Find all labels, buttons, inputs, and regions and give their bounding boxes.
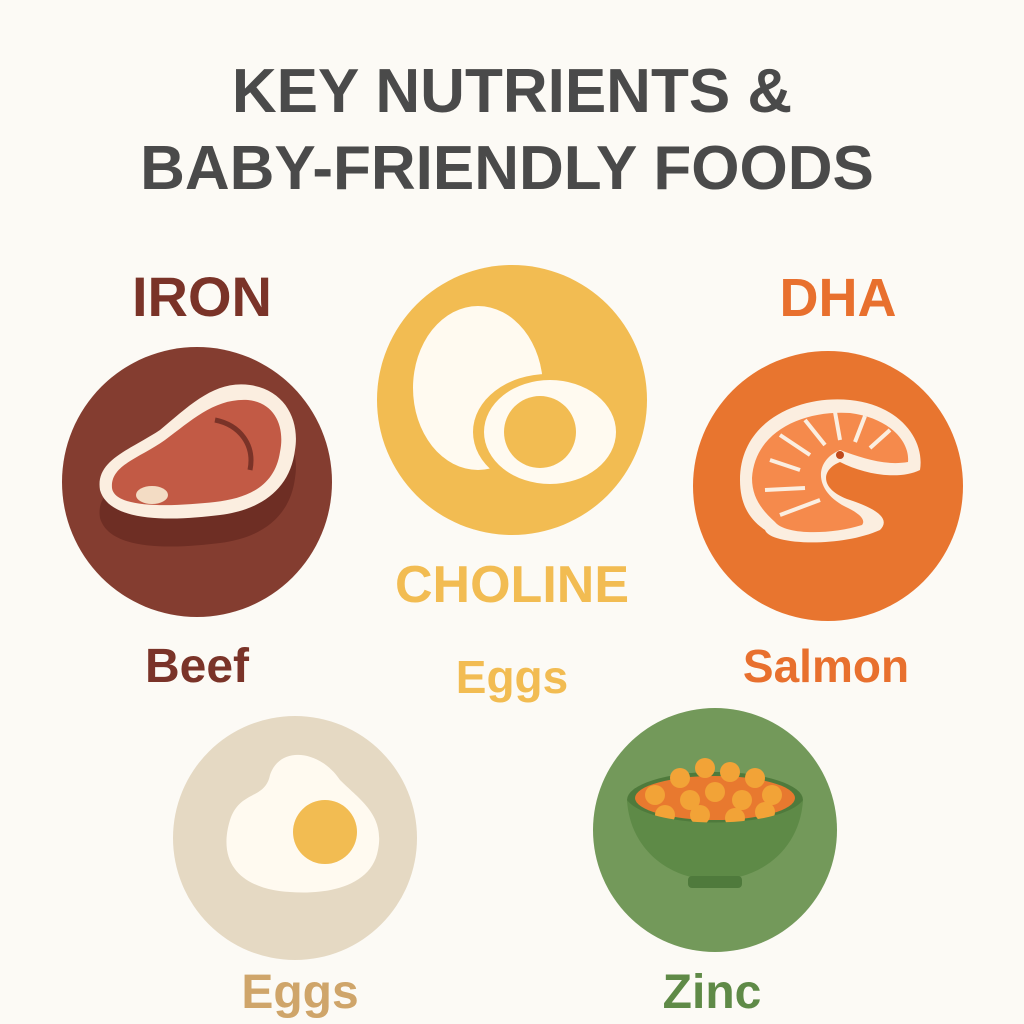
label: beef: Beef [145, 640, 250, 693]
icon: bowl circle [593, 708, 837, 952]
title: BABY-FRIENDLY FOODS [140, 134, 874, 203]
title: KEY NUTRIENTS & [232, 57, 792, 126]
icon: salmon circle [693, 351, 963, 621]
icon: egg circle [377, 265, 647, 535]
label: zinc: Zinc [663, 966, 761, 1019]
icon: fried egg circle [173, 716, 417, 960]
title [140, 57, 874, 203]
heading: iron: IRON [132, 265, 272, 328]
icon: beef circle [62, 347, 332, 617]
label: eggs: Eggs [241, 966, 359, 1019]
heading: dha: DHA [780, 268, 896, 328]
heading: choline: CHOLINE [395, 556, 629, 614]
label: eggs (choline): Eggs [456, 651, 568, 703]
label: salmon: Salmon [743, 640, 909, 692]
